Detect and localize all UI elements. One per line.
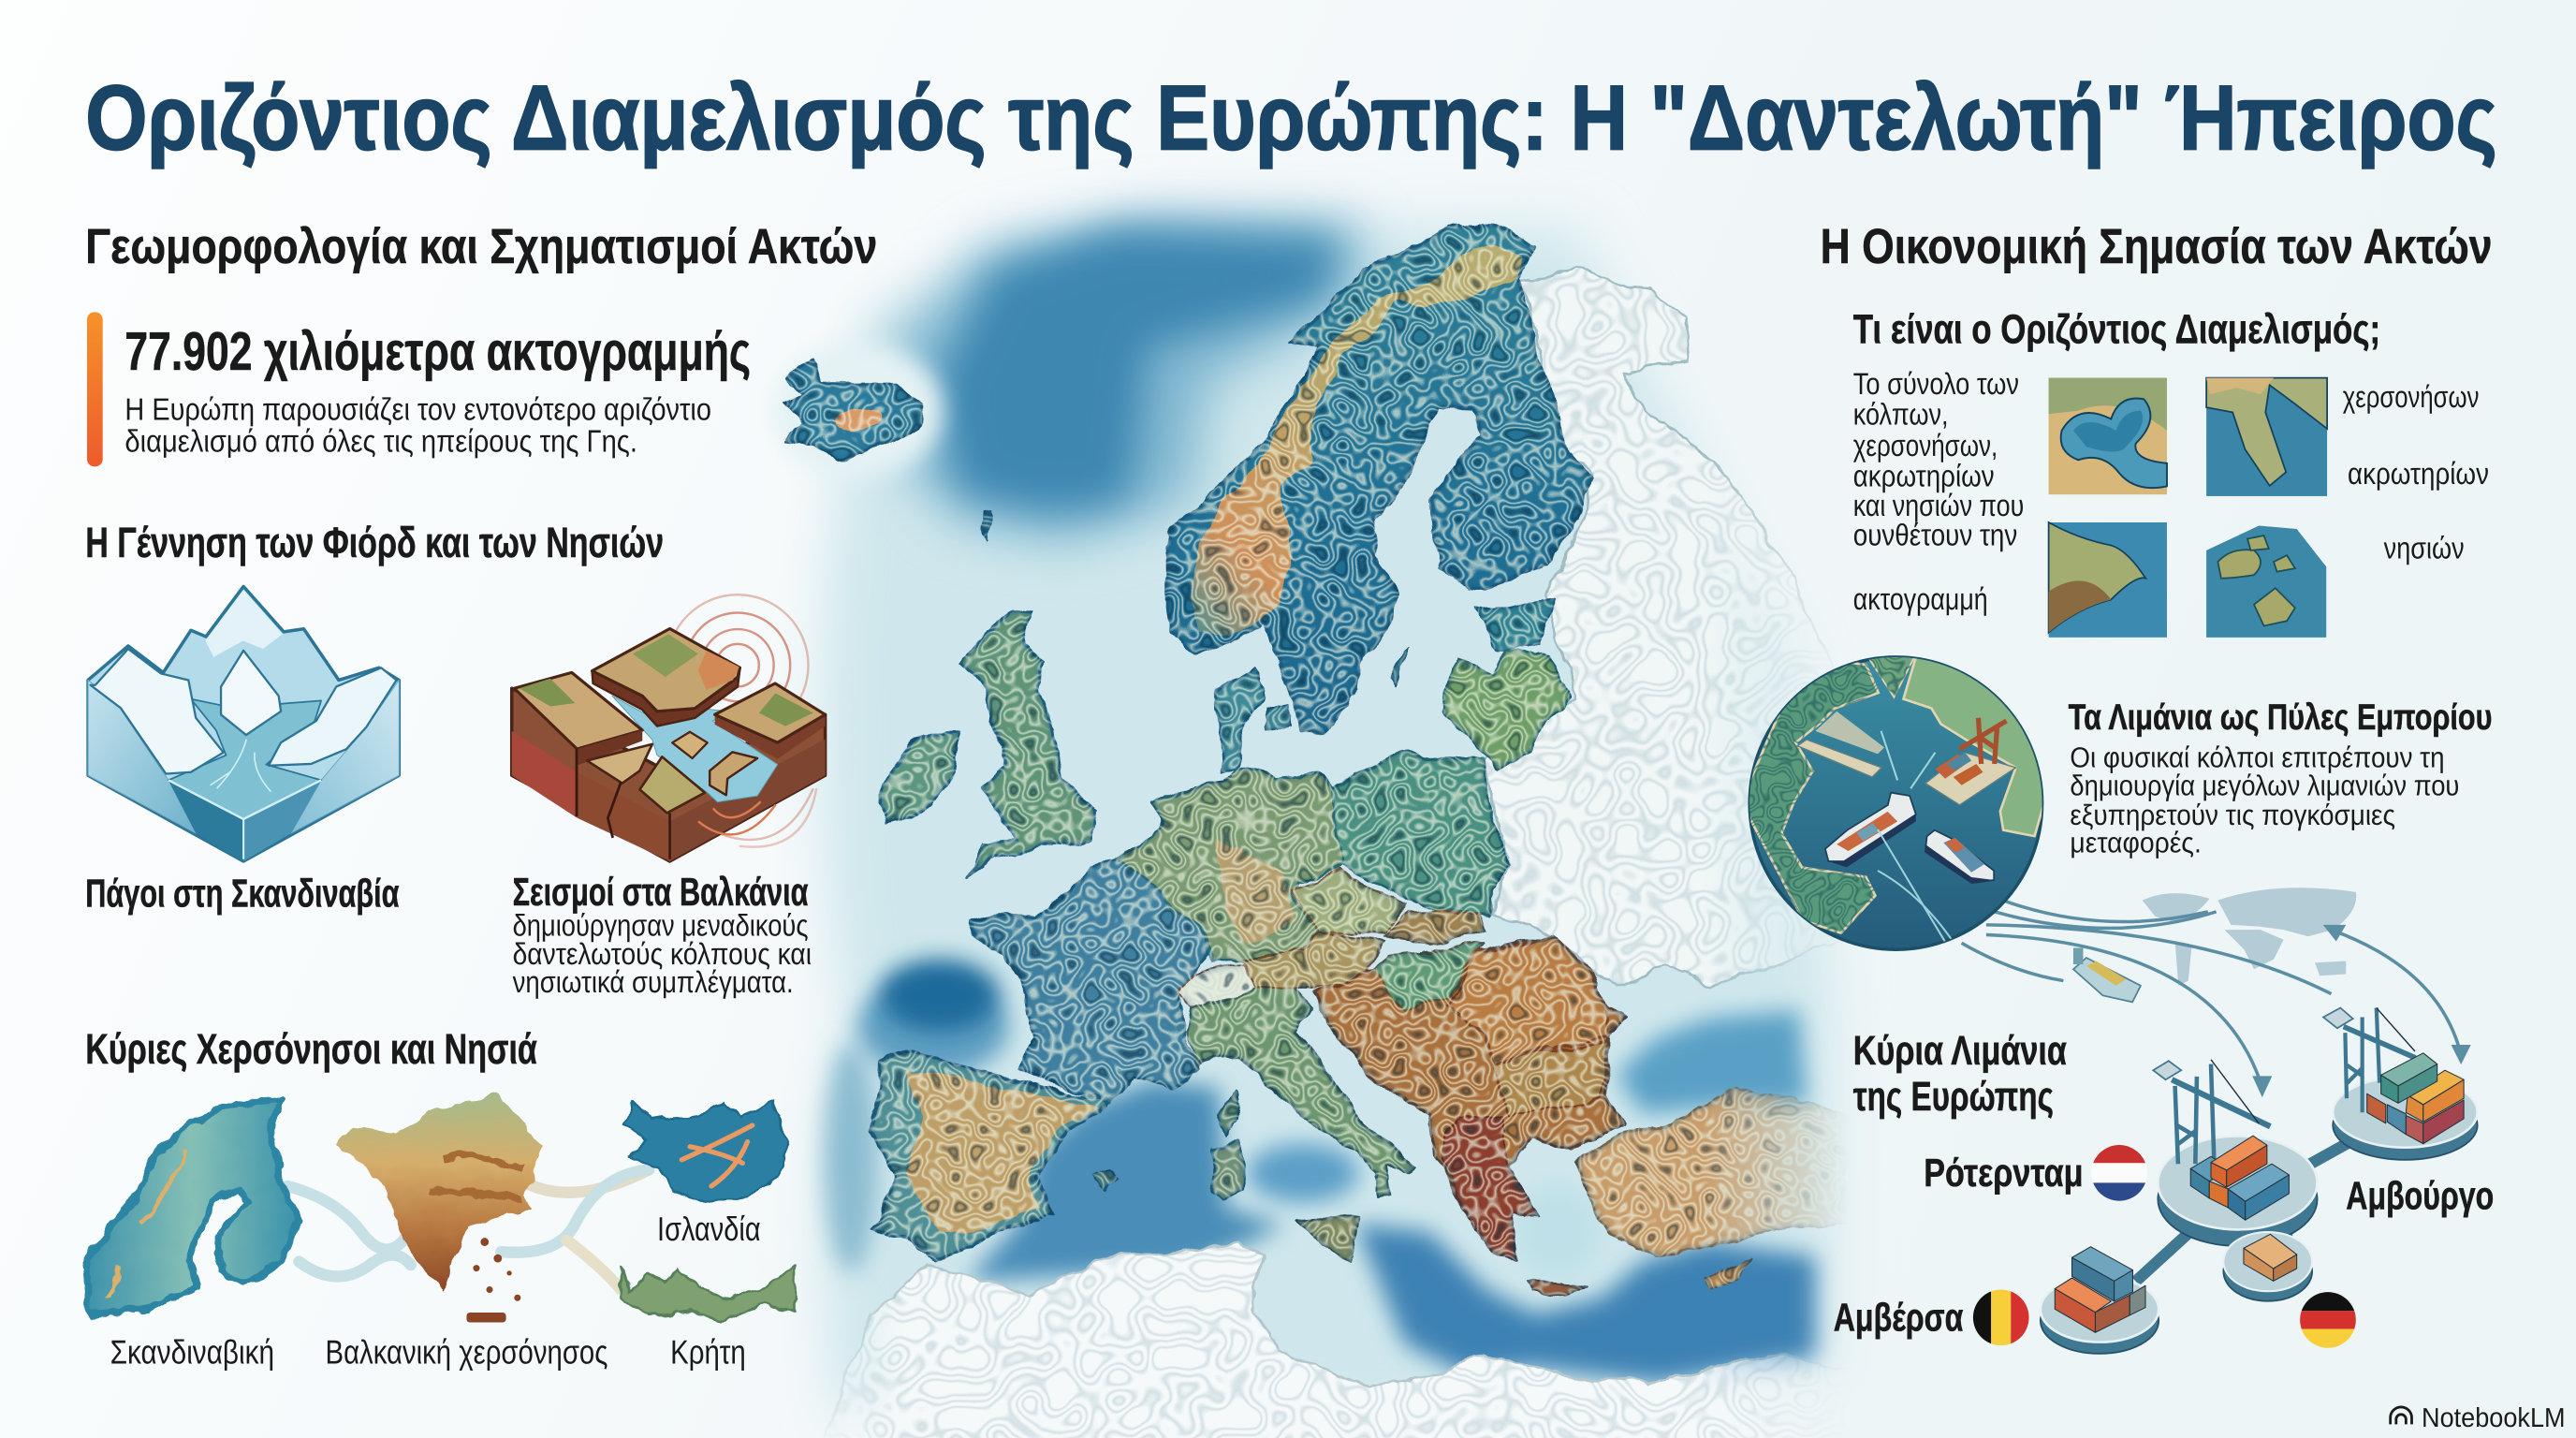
small ship: [1925, 830, 1994, 883]
arrows from harbour to world: [1962, 901, 2471, 1097]
Corsica: [1219, 1092, 1240, 1137]
label: Hamburg: Αμβούργο: [2346, 1175, 2494, 1219]
Turkey fading land: [1573, 1089, 1848, 1256]
Scandinavia: [1168, 225, 1589, 734]
big ship: [1825, 793, 1916, 867]
sea routes: [1878, 731, 1955, 945]
definition text: ουνθέτουν την: [1853, 518, 2017, 552]
Poland and Ukraine west: [1331, 753, 1510, 912]
definition text: [1853, 366, 2024, 616]
illustration: harbour circle: [1741, 653, 2054, 949]
sea: western Mediterranean: [966, 1081, 1284, 1282]
harbour land left: [1741, 657, 1879, 933]
thumbnail: cape: [2049, 522, 2167, 638]
ports description: εξυπηρετούν τις πογκόσμιες: [2070, 799, 2395, 831]
icon: glacier block: [88, 586, 399, 861]
Greece: [1441, 1117, 1541, 1263]
heading: geomorphology: Γεωμορφολογία και Σχηματισμοί Ακτών: [85, 220, 877, 274]
platform: Rotterdam: [2158, 1136, 2318, 1246]
Hungary: [1373, 941, 1484, 1012]
logo icon: [2391, 1407, 2411, 1424]
subheading: what is horizontal fragmentation: Τι είναι ο Οριζόντιος Διαμελισμός;: [1853, 307, 2380, 353]
icon: Crete: [621, 1265, 795, 1321]
sea: Iceland halo: [772, 342, 943, 479]
ports description: μεταφορές.: [2070, 827, 2202, 859]
NotebookLM logo: [2391, 1403, 2566, 1433]
Denmark: [1218, 668, 1262, 772]
sea: north Atlantic deep: [936, 230, 1339, 512]
icon: earthquake block: [512, 594, 826, 861]
label: peninsulas: χερσονήσων: [2343, 379, 2479, 414]
harbour land right: [1903, 657, 2054, 836]
stat description: Η Ευρώπη παρουσιάζει τον εντονότερο αριζόντιο: [124, 393, 711, 428]
label: capes: ακρωτηρίων: [2348, 456, 2489, 491]
France: [970, 859, 1206, 1104]
Sardinia: [1211, 1142, 1242, 1200]
Balkans: [1316, 936, 1627, 1263]
central map of Europe: [772, 217, 1856, 1438]
connectors between shapes: [287, 1169, 649, 1289]
thumbnail: islands: [2206, 526, 2326, 638]
sea: Bay of Biscay halo: [857, 977, 1009, 1076]
label: Iceland: Ισλανδία: [657, 1211, 761, 1249]
label: earthquakes in Balkans: Σεισμοί στα Βαλκάνια: [513, 871, 809, 915]
Gotland: [1390, 651, 1410, 686]
Austria: [1240, 933, 1383, 988]
heading: peninsulas and islands: Κύριες Χερσόνησοι και Νησιά: [85, 1024, 537, 1074]
ports description: [2070, 741, 2459, 859]
Bulgaria: [1493, 1041, 1607, 1117]
harbour land top: [1868, 657, 1915, 698]
label: Crete: Κρήτη: [670, 1334, 746, 1372]
Balearic islands: [1094, 1169, 1117, 1191]
faint world map: [2143, 888, 2356, 986]
panel: geomorphology: [85, 220, 877, 1372]
sea: Aegean shallow: [1515, 1182, 1600, 1282]
Great Britain: [961, 609, 1096, 874]
sea: north Atlantic mid tone: [887, 217, 1364, 542]
Czechia: [1293, 870, 1407, 933]
Switzerland: [1178, 966, 1254, 1008]
containers: Hamburg: [2367, 1053, 2464, 1144]
sea: west of Iberia: [825, 1043, 877, 1273]
crane: Hamburg: [2323, 1008, 2415, 1112]
flag: Belgium: [1971, 1289, 2030, 1345]
Ireland: [879, 733, 961, 827]
platform: small hub: [2223, 1232, 2312, 1301]
Cyprus: [1705, 1258, 1751, 1289]
containers on quay: [1936, 753, 1983, 785]
earthquake description: δαντελωτούς κόλπους και: [513, 936, 812, 971]
heading: main ports: [1853, 1028, 2068, 1121]
heading: main ports: Κύρια Λιμάνια: [1853, 1028, 2068, 1075]
definition text: και νησιών που: [1853, 488, 2024, 522]
heading: birth of fjords: Η Γέννηση των Φιόρδ και των Νησιών: [85, 518, 664, 566]
definition text: Το σύνολο των: [1853, 366, 2019, 401]
label: Scandinavian: Σκανδιναβική: [110, 1334, 274, 1372]
Romania: [1450, 936, 1607, 1063]
Iberia inner plateau: [907, 1068, 1097, 1232]
label: Rotterdam: Ρότερνταμ: [1924, 1152, 2083, 1196]
crane on quay: [1959, 718, 2007, 764]
crane: Rotterdam: [2153, 1060, 2270, 1164]
Italy: [1187, 988, 1416, 1197]
port network links: [2136, 1137, 2359, 1282]
flag: Netherlands: [2089, 1143, 2149, 1202]
Germany tan centre: [1216, 838, 1298, 945]
sea: Bay of Biscay: [881, 960, 999, 1032]
Iberia: [871, 1053, 1109, 1260]
platform: Hamburg: [2333, 1077, 2478, 1160]
icon: Balkan peninsula: [337, 1094, 542, 1323]
label: islands: νησιών: [2384, 531, 2465, 565]
quay left: [1797, 740, 1881, 777]
sea: Black Sea: [1617, 1010, 1808, 1114]
earthquake description: [513, 907, 812, 999]
earthquake description: νησιωτικά συμπλέγματα.: [513, 964, 794, 999]
containers: Antwerp: [2055, 1247, 2145, 1332]
earthquake description: δημιούργησαν μεναδικούς: [513, 907, 809, 942]
Iceland: [783, 361, 920, 460]
icon: Iceland: [624, 1101, 788, 1204]
label: ice in Scandinavia: Πάγοι στη Σκανδιναβία: [85, 873, 400, 917]
Slovakia: [1383, 912, 1484, 945]
definition text: χερσονήσων,: [1853, 428, 1998, 462]
land: colored Europe with lace texture: [783, 225, 1751, 1296]
Danish islands: [1265, 703, 1292, 733]
thumbnail: peninsula: [2206, 378, 2327, 496]
containers: Rotterdam: [2190, 1136, 2289, 1220]
label: Balkan peninsula: Βαλκανική χερσόνησος: [326, 1334, 608, 1372]
Norway highlands: [1191, 246, 1525, 638]
logo wordmark: NotebookLM: [2422, 1403, 2566, 1433]
boxes: small hub: [2244, 1234, 2297, 1281]
thumbnail: bay: [2049, 378, 2167, 494]
land: faded Russia: [1484, 271, 1848, 986]
stat headline: 77.902 χιλιόμετρα ακτογραμμής: [124, 320, 751, 381]
platform: Antwerp: [2041, 1276, 2159, 1354]
definition text: ακρωτηρίων: [1853, 459, 1995, 492]
stat description: διαμελισμό από όλες τις ηπείρους της Γης.: [124, 425, 637, 460]
Iceland interior: [835, 409, 881, 432]
Estonia: [1477, 599, 1553, 647]
stat accent bar: [87, 312, 103, 466]
Sicily: [1297, 1217, 1359, 1258]
panel: economic importance: [1741, 220, 2494, 1354]
quay upper: [1815, 712, 1884, 754]
definition text: κόλπων,: [1853, 397, 1949, 432]
definition text: ακτογραμμή: [1853, 581, 1988, 616]
sea: Tyrrhenian: [1247, 1143, 1358, 1202]
quay right: [1925, 753, 2016, 805]
Crete: [1526, 1280, 1584, 1296]
sea: eastern Mediterranean: [1355, 1224, 1815, 1383]
ports description: δημιουργία μεγόλων λιμανιών που: [2070, 769, 2459, 801]
icon: small cargo ship: [2073, 947, 2141, 1002]
Germany and Benelux: [1113, 766, 1340, 961]
Faroe and Shetland islets: [979, 509, 990, 542]
icon: Scandinavian peninsula: [85, 1099, 299, 1314]
land: faded North Africa: [822, 1243, 1856, 1438]
Latvia and Lithuania: [1443, 647, 1573, 772]
heading: main ports: της Ευρώπης: [1853, 1075, 2054, 1121]
sea: pale shallow base: [821, 226, 1832, 1426]
flag: Germany: [2298, 1291, 2358, 1349]
ports description: Οι φυσικαί κόλποι επιτρέπουν τη: [2070, 741, 2445, 773]
stat description: [124, 393, 711, 460]
label: Antwerp: Αμβέρσα: [1834, 1296, 1964, 1341]
